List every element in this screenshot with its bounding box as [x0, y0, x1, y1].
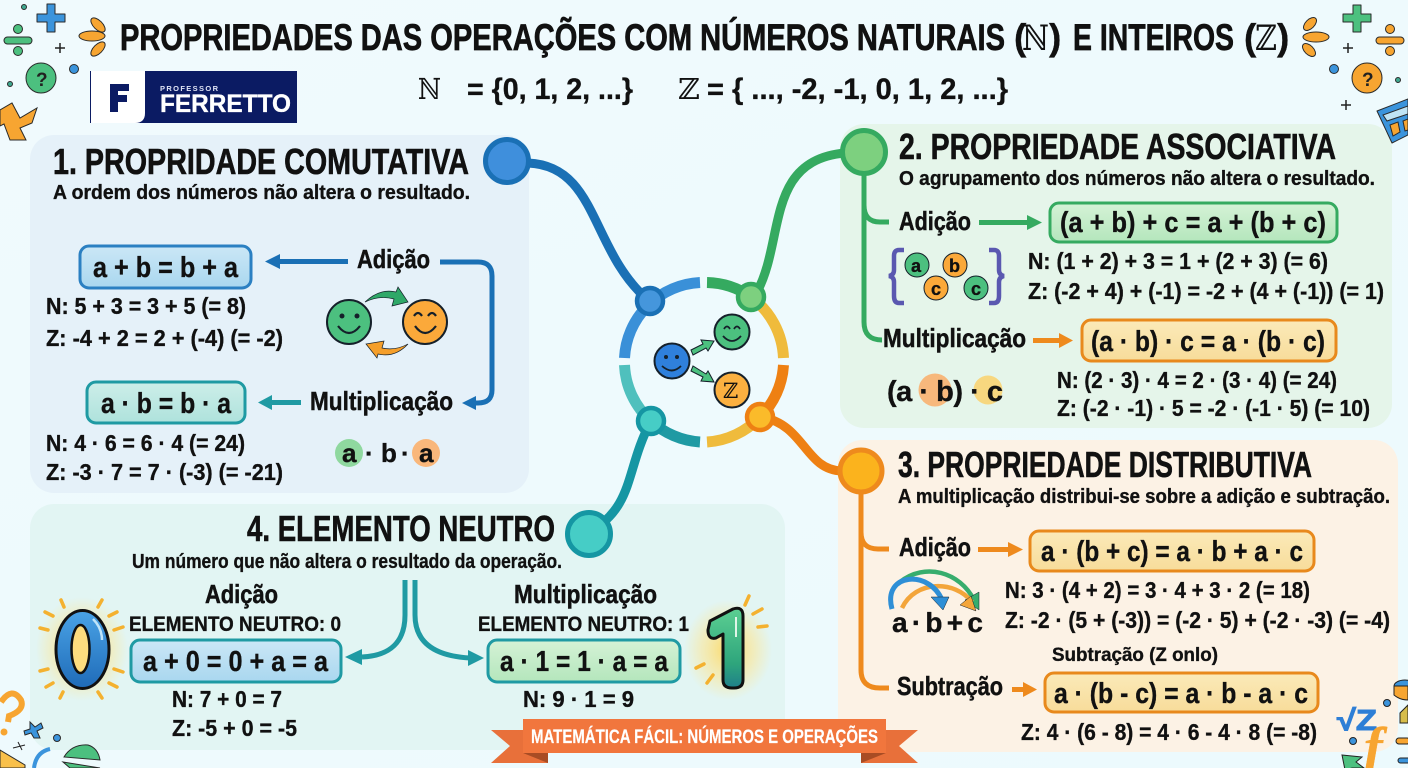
panel background: comutativa: [30, 135, 529, 493]
ring segment: orange: [760, 365, 784, 417]
logo: professor ferretto: FERRETTO: [160, 90, 291, 118]
ring segment: teal: [651, 421, 700, 442]
icon: grouped letters: [889, 250, 1004, 303]
node: teal small: [638, 408, 664, 434]
note: subtração: Subtração (Z onlo): [1052, 645, 1218, 666]
node: orange big: [840, 450, 882, 492]
split arrows: [345, 580, 484, 666]
banner: MATEMÁTICA FÁCIL: NÚMEROS E OPERAÇÕES: [531, 726, 878, 748]
formula box: neutro adição: [131, 640, 341, 682]
example: comutativa adição Z: Z: -4 + 2 = 2 + (-4) (= -2): [46, 325, 283, 351]
arrow: adição: [979, 215, 1042, 230]
decor: bottom right: [1337, 680, 1408, 768]
icon: integer coin: ℤ: [723, 379, 738, 403]
label: adição: Adição: [205, 579, 278, 609]
formula box: associativa adição: (a + b) + c = a + (b + c): [1060, 207, 1326, 239]
arrow: down: [691, 366, 714, 382]
icon: big one: [684, 596, 772, 700]
decor: top right: [1300, 5, 1408, 143]
connector: neutro: [590, 421, 651, 532]
formula box: a+b: [80, 246, 251, 288]
example: associativa adição Z: Z: (-2 + 4) + (-1) = -2 + (4 + (-1)) (= 1): [1028, 278, 1384, 304]
panel: distributiva: [838, 440, 1398, 752]
decor: bottom left: [0, 693, 100, 768]
logo: professor ferretto: [90, 71, 297, 123]
panel background: elemento neutro: [30, 504, 785, 750]
title: (: [1244, 17, 1257, 58]
icon: big zero: [36, 597, 128, 701]
icon: a b a: [335, 438, 440, 468]
central hub: [486, 130, 886, 556]
icon: grouped letters: c: [931, 279, 941, 299]
title: PROPRIEDADES DAS OPERAÇÕES COM NÚMEROS NATURAIS: [120, 16, 1005, 58]
icon: a b a: a: [419, 438, 434, 468]
set definition: integers: ℤ: [678, 72, 700, 106]
node: green small: [738, 284, 764, 310]
formula box: neutro multiplicação: a · 1 = 1 · a = a: [500, 646, 669, 678]
subtitle: elemento neutro: Um número que não altera o resultado da operação.: [132, 551, 562, 573]
arrow: adição to formula: [265, 254, 348, 269]
icon: smile swap: [327, 287, 447, 358]
title: (: [1014, 17, 1027, 58]
example: neutro adição N: N: 7 + 0 = 7: [172, 686, 282, 712]
title: ℤ: [1255, 19, 1277, 59]
label: adição: Adição: [899, 532, 971, 562]
decor: top right: ?: [1362, 70, 1374, 91]
label: adição: Adição: [357, 244, 430, 274]
arrow: adição: [978, 542, 1023, 557]
icon: distribution arcs: a · b + c: [892, 607, 983, 638]
node: orange small: [747, 404, 773, 430]
icon: grouped product: (a · b) · c: [887, 376, 1003, 408]
connector: comutativa: [528, 163, 648, 300]
formula box: neutro multiplicação: [488, 640, 680, 682]
formula box: a·b: a · b = b · a: [101, 388, 232, 420]
arrow: multiplicação to formula: [258, 395, 301, 410]
icon: a b a: ·: [401, 438, 410, 468]
example: comutativa multiplicação Z: Z: -3 · 7 = 7 · (-3) (= -21): [46, 459, 283, 485]
label: elemento neutro 0: ELEMENTO NEUTRO: 0: [129, 613, 341, 636]
connector: adição to multiplicação: [440, 262, 492, 410]
panel background: associativa: [840, 124, 1392, 428]
panel: elemento neutro: [30, 504, 785, 750]
formula box: distributiva adição: a · (b + c) = a · b + a · c: [1041, 536, 1303, 568]
ring segment: light teal: [624, 365, 651, 421]
set definition: naturals: = {0, 1, 2, ...}: [467, 73, 633, 106]
title: ℕ: [1022, 19, 1049, 59]
panel background: distributiva: [838, 440, 1398, 752]
node: blue big: [486, 140, 528, 182]
title: E INTEIROS: [1073, 17, 1234, 58]
formula box: a+b: a + b = b + a: [93, 252, 239, 284]
example: distributiva subtração Z: Z: 4 · (6 - 8) = 4 · 6 - 4 · 8 (= -8): [1021, 719, 1317, 745]
example: distributiva adição N: N: 3 · (4 + 2) = 3 · 4 + 3 · 2 (= 18): [1005, 577, 1310, 603]
panel: associativa: [840, 124, 1392, 428]
connector: associativa: [757, 153, 845, 292]
example: comutativa multiplicação N: N: 4 · 6 = 6 · 4 (= 24): [46, 430, 245, 456]
node: teal big: [568, 512, 610, 556]
label: subtração: Subtração: [897, 671, 1003, 701]
ring segment: yellow upper: [751, 297, 784, 358]
connector: distributiva: [762, 417, 842, 471]
ring segment: yellow lower: [707, 417, 760, 442]
icon: distribution arcs: [891, 572, 983, 638]
arrow: multiplicação: [1033, 333, 1073, 348]
example: associativa multiplicação Z: Z: (-2 · -1) · 5 = -2 · (-1 · 5) (= 10): [1057, 395, 1370, 421]
branch line: associativa: [864, 172, 889, 340]
example: associativa adição N: N: (1 + 2) + 3 = 1 + (2 + 3) (= 6): [1028, 248, 1328, 274]
formula box: a·b: [87, 382, 245, 423]
icon: grouped letters: a: [911, 256, 922, 276]
node: green big: [842, 130, 886, 174]
icon: a b a: a: [342, 438, 357, 468]
ring segment: green: [707, 282, 751, 297]
banner: [491, 719, 918, 763]
set definition: integers: = { ..., -2, -1, 0, 1, 2, ...}: [707, 73, 1008, 106]
icon: grouped letters: b: [949, 256, 960, 276]
ring segment: blue: [624, 282, 700, 358]
formula box: distributiva subtração: a · (b - c) = a · b - a · c: [1054, 678, 1308, 710]
label: multiplicação: Multiplicação: [883, 323, 1026, 353]
decor: top left: [0, 4, 108, 140]
set definition: naturals: ℕ: [418, 72, 441, 106]
formula box: neutro adição: a + 0 = 0 + a = a: [143, 646, 329, 678]
decor: bottom right: √Z: [1337, 705, 1377, 737]
example: associativa multiplicação N: N: (2 · 3) · 4 = 2 · (3 · 4) (= 24): [1057, 367, 1337, 393]
example: neutro multiplicação N: N: 9 · 1 = 9: [523, 686, 634, 712]
icon: integer coin: [714, 372, 750, 408]
title: ): [1049, 17, 1061, 58]
heading: elemento neutro: 4. ELEMENTO NEUTRO: [247, 508, 555, 549]
subtitle: comutativa: A ordem dos números não altera o resultado.: [53, 182, 470, 204]
example: comutativa adição N: N: 5 + 3 = 3 + 5 (= 8): [46, 293, 246, 319]
formula box: associativa multiplicação: [1082, 320, 1336, 361]
arrow: subtração: [1012, 682, 1037, 697]
decor: top left: ?: [36, 70, 48, 91]
panel: comutativa: [30, 135, 529, 493]
label: elemento neutro 1: ELEMENTO NEUTRO: 1: [478, 613, 689, 636]
icon: blue face: [654, 344, 690, 378]
title: ): [1277, 17, 1289, 58]
subtitle: associativa: O agrupamento dos números não altera o resultado.: [899, 168, 1375, 190]
icon: grouped letters: c: [971, 279, 981, 299]
label: adição: Adição: [899, 206, 971, 236]
icon: a b a: b: [381, 438, 397, 468]
label: multiplicação: Multiplicação: [310, 386, 453, 416]
label: multiplicação: Multiplicação: [514, 579, 657, 609]
example: neutro adição Z: Z: -5 + 0 = -5: [172, 715, 297, 741]
icon: a b a: ·: [365, 438, 374, 468]
heading: comutativa: 1. PROPRIDADE COMUTATIVA: [53, 141, 469, 182]
branch line: distributiva: [861, 490, 889, 688]
formula box: distributiva adição: [1030, 531, 1314, 571]
node: blue small: [637, 288, 663, 314]
icon: green face: [714, 314, 750, 350]
logo: professor ferretto: PROFESSOR: [160, 84, 219, 93]
arrow: up: [691, 340, 714, 355]
formula box: associativa multiplicação: (a · b) · c = a · (b · c): [1091, 326, 1325, 358]
